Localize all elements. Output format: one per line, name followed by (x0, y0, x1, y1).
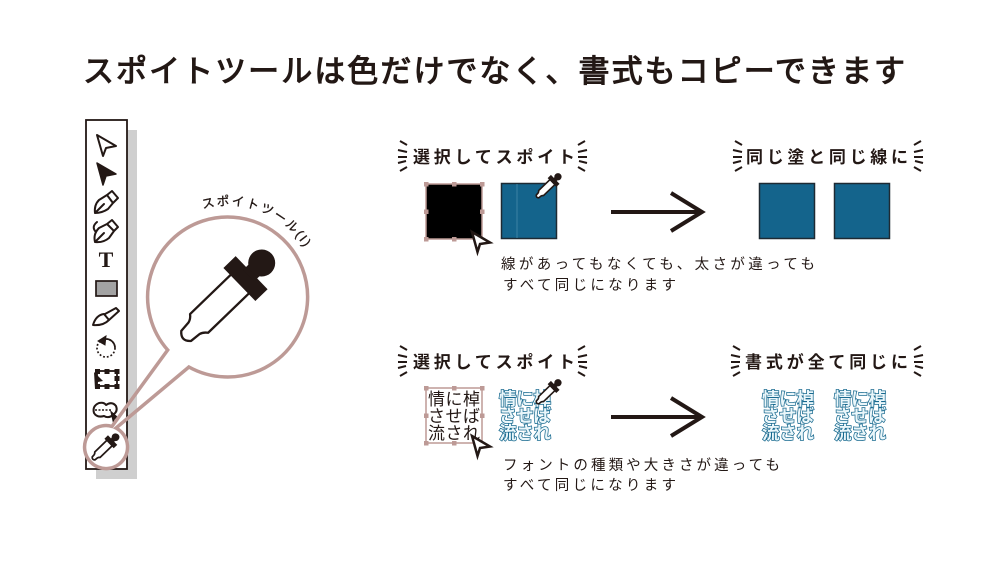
heading: select and eyedrop: 選択してスポイト (413, 147, 575, 167)
selected text: 情に棹 (428, 390, 480, 409)
outlined source text: 情に棹 (499, 389, 551, 409)
selected text (428, 390, 480, 443)
burst right (578, 346, 587, 376)
panel: toolbar (84, 120, 137, 479)
selection handles (424, 386, 484, 446)
square inner line (516, 184, 518, 238)
result text 2 (834, 389, 886, 443)
result text 2: させば (834, 406, 886, 426)
heading: same fill and stroke: 同じ塗と同じ線に (746, 148, 908, 167)
icon: free transform tool (94, 369, 120, 389)
callout: eyedropper magnifier (82, 194, 310, 470)
burst right (914, 346, 923, 376)
burst right (914, 141, 923, 171)
result text 1 (762, 389, 814, 443)
icon: pen tool (95, 191, 118, 213)
icon: selection tool (97, 135, 116, 156)
result text 1: 情に棹 (762, 389, 814, 409)
title: スポイトツールは色だけでなく、書式もコピーできます (83, 54, 905, 89)
burst left (398, 141, 407, 171)
black selected square (426, 184, 482, 239)
outlined source text: させば (499, 406, 552, 426)
burst left (398, 346, 407, 376)
selection handles (424, 182, 484, 242)
icon: direct selection tool (97, 163, 116, 185)
burst left (731, 346, 740, 376)
burst left (733, 141, 742, 171)
arrow (611, 193, 702, 231)
outlined source text (499, 389, 552, 443)
result text 2: 情に棹 (834, 389, 886, 409)
blue source square (502, 184, 556, 238)
result square 2 (834, 184, 890, 238)
icon: brush tool (93, 308, 119, 325)
icon: type tool: T (99, 247, 114, 272)
burst right (578, 141, 587, 171)
panel: fill and stroke example (398, 141, 923, 294)
icon: rotate tool (97, 336, 115, 357)
result square 1 (760, 184, 814, 238)
result text 2: 流され (834, 423, 886, 443)
outlined source text: 流され (499, 423, 552, 443)
icon: eyedropper on text (532, 376, 565, 408)
selected text: させば (428, 407, 480, 426)
toolbar shadow (96, 130, 137, 479)
caption line 1: フォントの種類や大きさが違っても (503, 457, 780, 474)
icon: eyedropper tool (88, 430, 123, 464)
caption line 1: 線があってもなくても、太さが違っても (501, 256, 815, 273)
icon: large eyedropper (167, 237, 287, 355)
icon: eyedropper on square (532, 170, 565, 202)
cursor (472, 232, 490, 252)
icon: rectangle tool (96, 281, 117, 296)
result text 1: 流され (762, 423, 814, 443)
heading: select and eyedrop: 選択してスポイト (413, 352, 575, 372)
caption line 2: すべて同じになります (503, 277, 676, 294)
arrow (611, 398, 702, 436)
panel: text format example (398, 346, 923, 494)
heading: all formatting the same: 書式が全て同じに (745, 352, 908, 372)
callout bubble (85, 217, 308, 469)
icon: curvature pen tool (94, 220, 118, 242)
icon: shape builder tool (94, 403, 119, 423)
cursor (472, 436, 490, 456)
highlight backing (84, 426, 128, 468)
selected text: 流され (428, 424, 480, 443)
toolbar frame (86, 120, 127, 469)
caption line 2: すべて同じになります (503, 477, 676, 494)
selection box (426, 388, 482, 443)
curved label: スポイトツール(I) (203, 194, 310, 246)
result text 1: させば (762, 406, 814, 426)
